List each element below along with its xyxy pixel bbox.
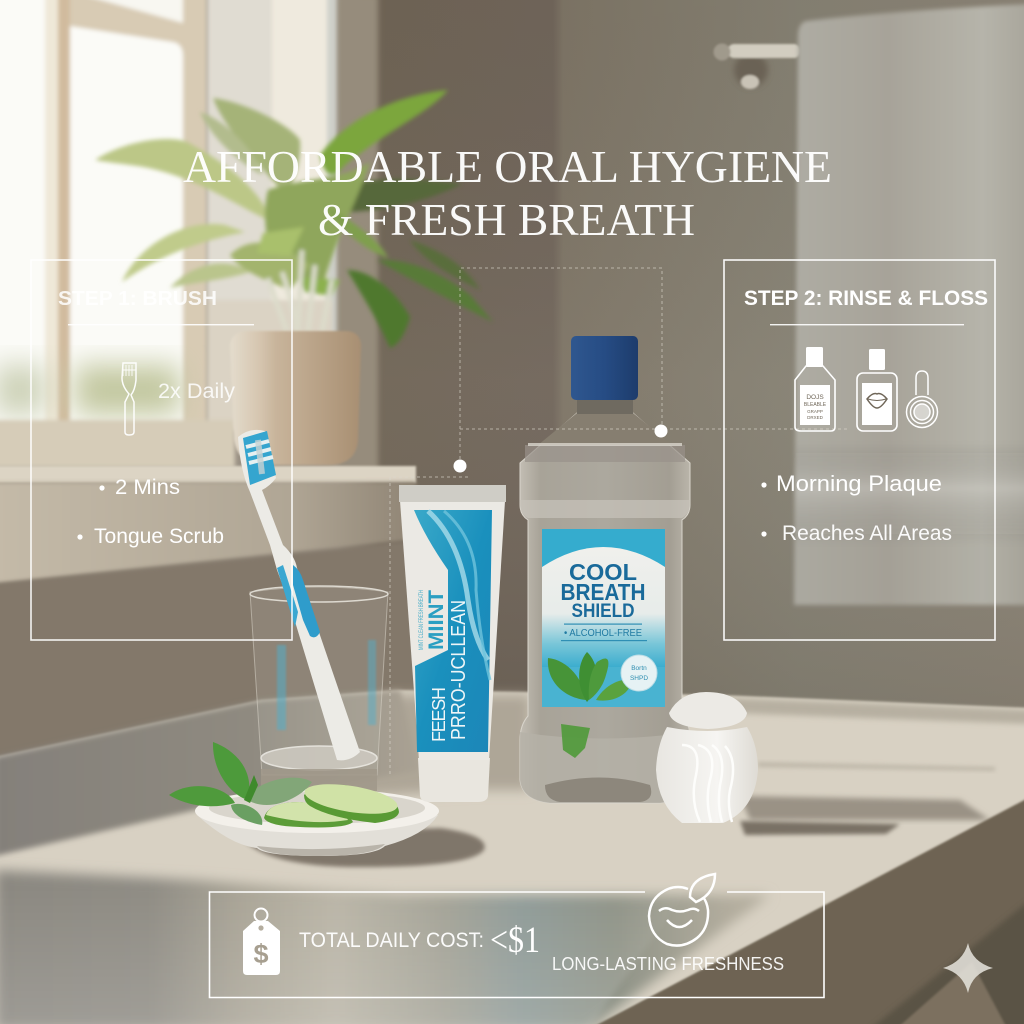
title: AFFORDABLE ORAL HYGIENE xyxy=(183,141,832,192)
step 1 heading: STEP 1: BRUSH xyxy=(58,287,217,310)
bottle label: SHPD xyxy=(630,675,648,682)
bottle cap xyxy=(571,336,638,400)
label: long lasting freshness: LONG-LASTING FRESHNESS xyxy=(552,953,784,974)
title: & FRESH BREATH xyxy=(318,194,695,245)
panel: bottom cost and freshness xyxy=(210,874,824,998)
tube label: FEESH xyxy=(429,687,449,742)
step 2 heading: STEP 2: RINSE & FLOSS xyxy=(744,287,988,310)
title xyxy=(183,141,832,245)
dental floss container xyxy=(656,692,758,823)
icon: price tag: $ xyxy=(253,939,269,969)
icon: floss xyxy=(906,371,938,428)
plant pot xyxy=(230,331,361,465)
dashed connector lines xyxy=(390,268,848,775)
icon: rinse bottle with lips xyxy=(857,349,897,431)
icon: mouthwash bottle: DRXED xyxy=(807,415,824,420)
tube label: PRRO-UCLLEAN xyxy=(448,600,470,740)
cucumber slices xyxy=(264,779,399,827)
tube label: MIINT xyxy=(425,590,448,650)
towel bar xyxy=(714,44,800,89)
panel: step 2 rinse and floss xyxy=(724,260,995,640)
bottle label: Bortn xyxy=(631,665,647,672)
toothbrush xyxy=(238,430,360,760)
icon: smiling fruit with leaf xyxy=(649,874,715,946)
bullet: reaches all areas: Reaches All Areas xyxy=(782,522,952,545)
bottle label: SHIELD xyxy=(572,601,634,622)
drinking glass xyxy=(250,586,388,791)
bottle label xyxy=(542,529,665,707)
tube label xyxy=(414,510,492,752)
toothpaste tube xyxy=(399,485,506,802)
bottle label: BREATH xyxy=(560,579,646,605)
potted plant xyxy=(95,90,493,465)
icon: mouthwash bottle: BLEABLE xyxy=(804,402,827,408)
mouthwash bottle xyxy=(520,336,690,803)
plate with mint and cucumber xyxy=(169,742,485,867)
mint leaves xyxy=(169,742,312,825)
bullet: 2 mins: 2 Mins xyxy=(115,476,180,499)
value: under one dollar: <$1 xyxy=(490,920,540,961)
connector dots xyxy=(454,424,668,472)
icon: toothbrush xyxy=(122,363,136,435)
label: 2x daily: 2x Daily xyxy=(158,380,236,403)
bullet: morning plaque: Morning Plaque xyxy=(776,471,942,496)
icon: sparkle mark xyxy=(943,943,993,993)
panel: step 1 brush xyxy=(31,260,292,640)
bullet: tongue scrub: Tongue Scrub xyxy=(94,525,224,548)
background: hanging towel and bar xyxy=(714,4,1024,605)
tube label: MINT CLEAN FRESH BREATH xyxy=(419,590,425,650)
icon: mouthwash bottle xyxy=(795,347,835,431)
label: total daily cost: TOTAL DAILY COST: xyxy=(299,929,484,952)
icon: price tag xyxy=(243,908,280,975)
background: counter top xyxy=(0,690,1024,1024)
plant leaves xyxy=(95,90,493,348)
bottle label: • ALCOHOL-FREE xyxy=(564,627,642,639)
icon: mouthwash bottle: DOJS xyxy=(806,394,824,401)
icon: mouthwash bottle: GRAPP xyxy=(807,409,823,414)
bottle label: COOL xyxy=(569,559,637,585)
